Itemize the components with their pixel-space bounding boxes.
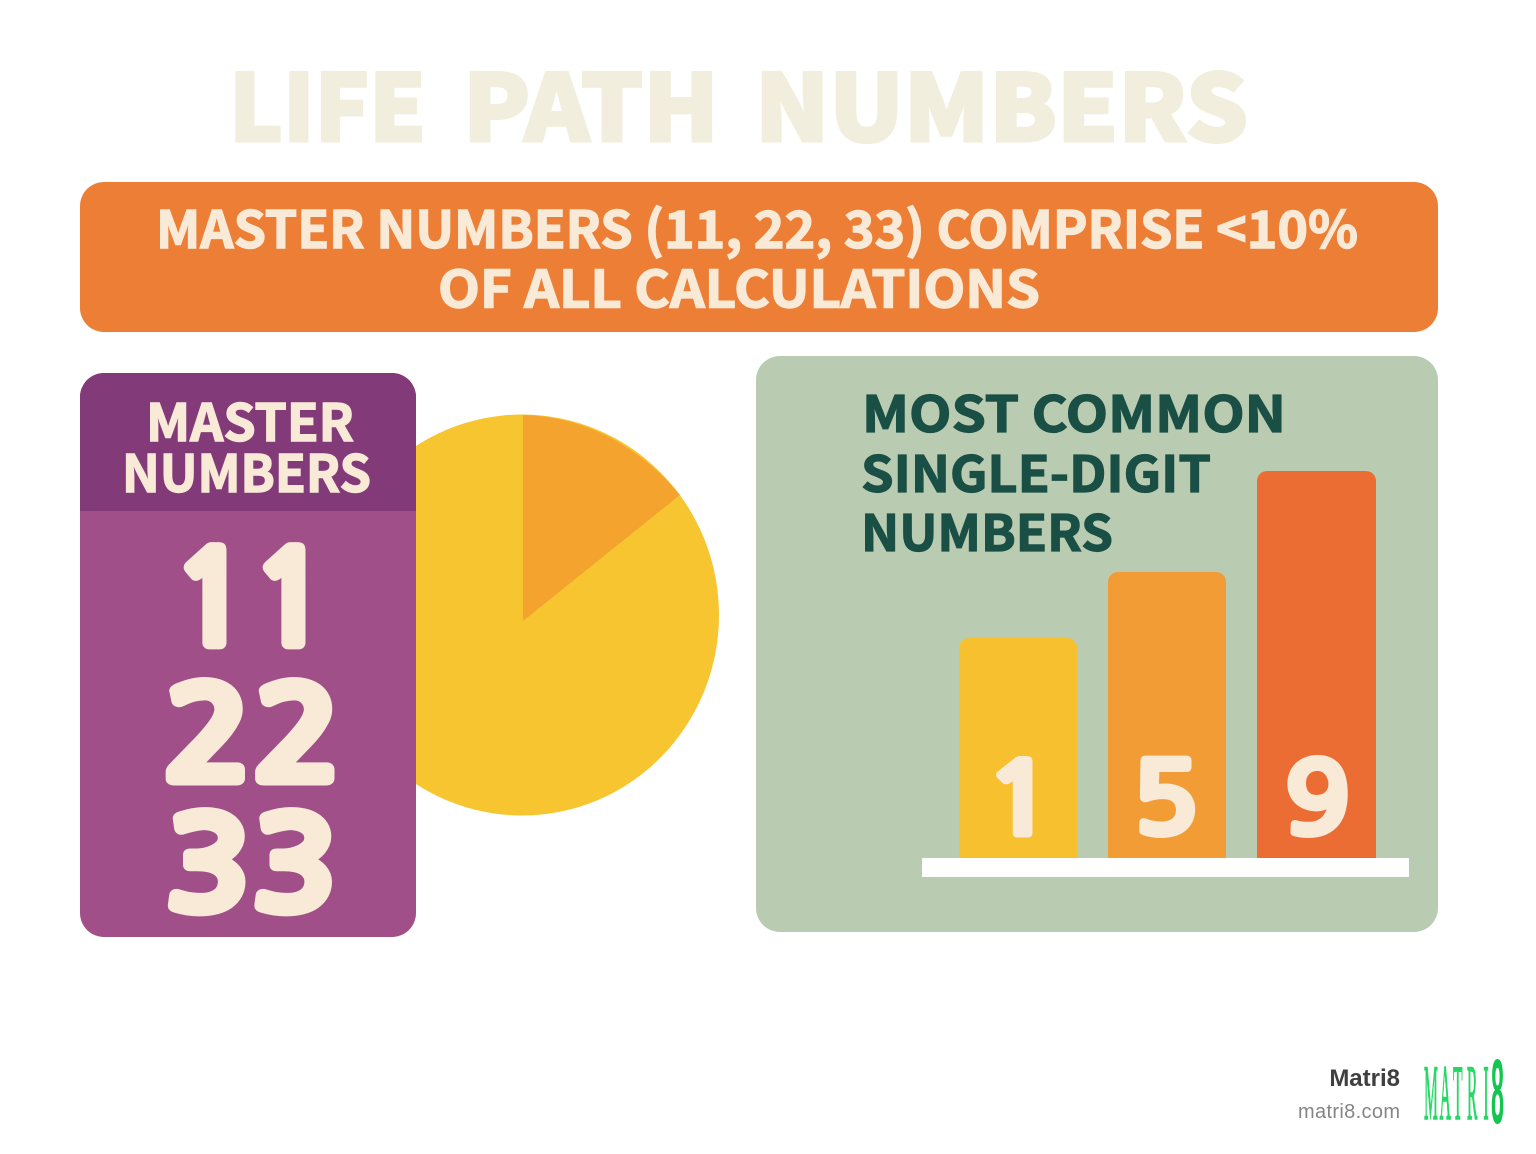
bar chart baseline — [922, 858, 1409, 877]
pie wedge — [523, 415, 680, 621]
number 11: 11 — [172, 537, 330, 664]
banner text line 2: OF ALL CALCULATIONS — [438, 248, 1040, 322]
bar: 9 — [1257, 471, 1376, 858]
number 22: 22 — [163, 673, 342, 800]
title: NUMBERS — [755, 35, 1248, 168]
bar: 1: 1 — [984, 751, 1056, 849]
bar: 5: 5 — [1132, 751, 1199, 849]
logo: matri8: MATRI — [1424, 1051, 1489, 1137]
pie chart — [325, 414, 719, 816]
header text: master: MASTER — [146, 382, 354, 456]
footer brand name: Matri8 — [1329, 1065, 1400, 1092]
panel heading line 2: SINGLE-DIGIT — [861, 435, 1211, 507]
panel header — [80, 373, 416, 511]
panel heading line 3: NUMBERS — [861, 494, 1113, 566]
bar: 5 — [1108, 572, 1226, 858]
title: PATH — [463, 35, 719, 168]
bar: 9: 9 — [1284, 751, 1350, 849]
header text: numbers: NUMBERS — [122, 433, 371, 507]
logo: matri8 — [1424, 1041, 1504, 1143]
title: LIFE — [229, 35, 426, 168]
number 33: 33 — [165, 803, 338, 930]
panel heading line 1: MOST COMMON — [862, 375, 1286, 447]
panel: master numbers — [80, 373, 416, 937]
footer url: matri8.com — [1298, 1101, 1400, 1123]
banner: master numbers share — [80, 182, 1438, 332]
banner text line 1: MASTER NUMBERS (11, 22, 33) COMPRISE <10% — [156, 189, 1358, 263]
bar: 1 — [959, 638, 1077, 858]
panel: most common single-digit numbers — [756, 356, 1438, 932]
title — [229, 35, 1248, 168]
